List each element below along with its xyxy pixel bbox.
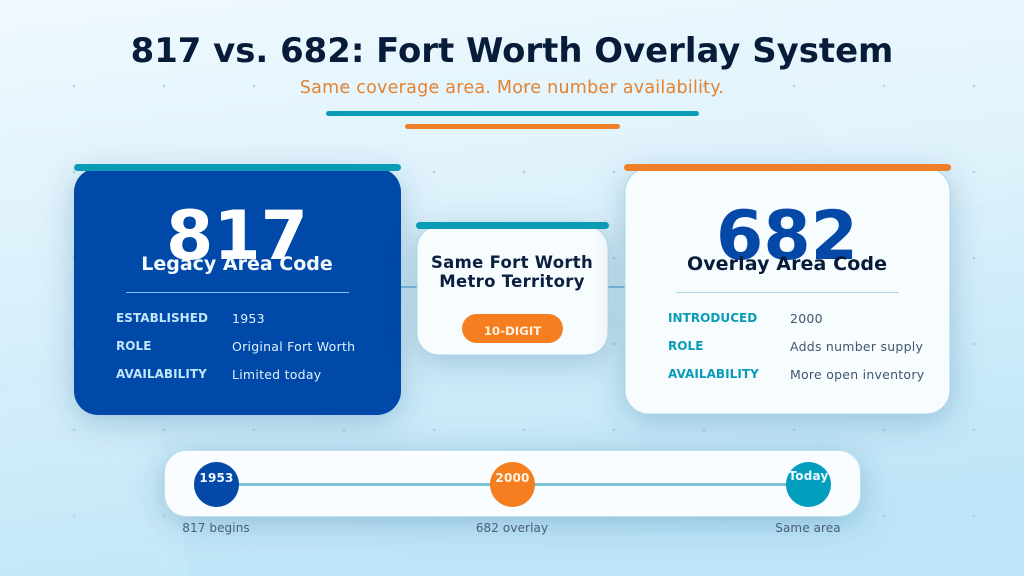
682 number: 682 — [716, 197, 858, 276]
milestone 1953: 1953 — [199, 471, 234, 485]
subtitle: Same coverage area. More number availability. — [300, 78, 724, 98]
milestone 1953 — [182, 462, 250, 535]
title: 817 vs. 682: Fort Worth Overlay System — [131, 31, 893, 70]
connector between the cards — [400, 286, 626, 288]
panel: same territory — [416, 222, 609, 355]
682 card heading: Overlay Area Code — [687, 253, 887, 275]
817 facts: ESTABLISHED — [116, 311, 208, 325]
panel: timeline — [164, 450, 860, 535]
817 card heading: Legacy Area Code — [141, 253, 333, 275]
milestone 1953: 817 begins — [182, 521, 250, 535]
817 facts: 1953 — [232, 311, 265, 326]
682 facts — [668, 311, 925, 382]
682 facts: INTRODUCED — [668, 311, 757, 325]
682 facts: Adds number supply — [790, 339, 923, 354]
682 facts: More open inventory — [790, 367, 925, 382]
center heading: Metro Territory — [439, 272, 585, 291]
milestone today: Today — [789, 469, 828, 483]
panel: 682 overlay area code — [624, 164, 951, 414]
milestone 2000 — [476, 462, 548, 535]
817 facts: AVAILABILITY — [116, 367, 207, 381]
682 facts: ROLE — [668, 339, 704, 353]
10-digit pill — [462, 314, 563, 343]
milestone today — [775, 462, 841, 535]
10-digit pill: 10-DIGIT — [484, 324, 541, 338]
682 facts: 2000 — [790, 311, 823, 326]
817 number: 817 — [166, 197, 308, 276]
817 facts: ROLE — [116, 339, 152, 353]
milestone today: Same area — [775, 521, 841, 535]
milestone 2000: 2000 — [495, 471, 530, 485]
panel: 817 legacy area code — [74, 164, 401, 415]
milestone 2000: 682 overlay — [476, 521, 548, 535]
817 facts — [116, 311, 355, 382]
817 facts: Limited today — [232, 367, 322, 382]
817 facts: Original Fort Worth — [232, 339, 355, 354]
682 facts: AVAILABILITY — [668, 367, 759, 381]
center heading: Same Fort Worth — [431, 253, 593, 272]
accent bars under the title — [326, 111, 699, 129]
